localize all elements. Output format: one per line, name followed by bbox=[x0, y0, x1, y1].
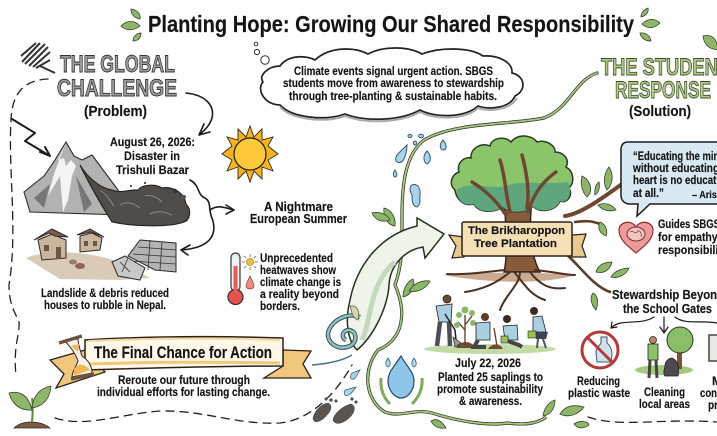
heading: the global challenge bbox=[21, 43, 177, 120]
thought cloud: through tree-planting & sustainable habits. bbox=[289, 89, 497, 103]
text: landslide caption: Landslide & debris reduced bbox=[41, 286, 169, 300]
icons: rain drops and footprint bbox=[393, 134, 446, 207]
icon: thermometer bbox=[228, 253, 258, 304]
heading: the global challenge: CHALLENGE bbox=[57, 75, 177, 102]
heading: stewardship beyond the school gates bbox=[612, 287, 717, 316]
text: july 22 planting: promote sustainability bbox=[437, 382, 543, 396]
text: reroute our future: individual efforts for lasting change. bbox=[97, 385, 270, 399]
text: disaster date: August 26, 2026: bbox=[110, 135, 195, 149]
thought cloud: Climate events signal urgent action. SBGS bbox=[294, 64, 493, 78]
icon: no plastic bottle bbox=[582, 332, 618, 368]
text: july 22 planting: July 22, 2026 bbox=[455, 356, 521, 370]
heading: the global challenge: (Problem) bbox=[84, 104, 147, 120]
icon: sun bbox=[222, 126, 278, 182]
heading: the student response: (Solution) bbox=[629, 104, 691, 120]
text: unprecedented heatwaves: a reality beyond bbox=[260, 287, 339, 301]
icon: mountain and landslide bbox=[24, 142, 190, 226]
text: nightmare european summer: A Nightmare bbox=[264, 200, 333, 214]
icon: footprints bbox=[313, 398, 357, 423]
arrows: stewardship branches bbox=[611, 317, 717, 333]
arrow: challenge to disaster bbox=[186, 93, 213, 135]
text: landslide caption bbox=[41, 286, 169, 312]
text: cleaning local areas: local areas bbox=[639, 397, 690, 411]
text: unprecedented heatwaves: borders. bbox=[260, 299, 300, 313]
text: guides sbgs bbox=[658, 217, 717, 257]
text: unprecedented heatwaves: Unprecedented bbox=[260, 251, 333, 265]
icon: cleaning person with tree bbox=[635, 327, 693, 378]
text: disaster date: Disaster in bbox=[124, 149, 180, 163]
icon: book bbox=[709, 335, 717, 361]
text: cleaning local areas: Cleaning bbox=[644, 385, 685, 399]
thought cloud bbox=[254, 42, 523, 121]
text: unprecedented heatwaves: climate change is bbox=[260, 275, 341, 289]
text: reducing plastic waste bbox=[568, 374, 630, 400]
icon: heart with brain bbox=[619, 222, 653, 253]
vine: green connecting stem bbox=[368, 73, 597, 428]
heading: the student response bbox=[601, 36, 717, 120]
icon: destroyed houses and wall bbox=[26, 229, 176, 280]
text: july 22 planting: Planted 25 saplings to bbox=[438, 370, 543, 384]
title: Planting Hope: Growing Our Shared Responsibility bbox=[148, 11, 634, 37]
banner: the brikharoppon tree plantation: The Brikharoppon bbox=[468, 225, 565, 237]
text: nightmare european summer: European Summer bbox=[250, 212, 347, 226]
icon: wind spiral bbox=[312, 306, 360, 396]
heading: the global challenge: THE GLOBAL bbox=[60, 51, 175, 78]
text: july 22 planting bbox=[437, 356, 543, 408]
people planting saplings bbox=[424, 295, 556, 354]
text: mindful consumption practices bbox=[700, 374, 717, 412]
text: unprecedented heatwaves: heatwaves show bbox=[260, 263, 337, 277]
speech bubble: aristotle quote: at all.” bbox=[633, 186, 664, 200]
arrow: disaster squiggle to europe and rubble bbox=[181, 180, 234, 255]
dashed path: left and bottom route bbox=[9, 79, 717, 423]
text: nightmare european summer bbox=[250, 200, 347, 226]
text: unprecedented heatwaves bbox=[260, 251, 341, 313]
tree bbox=[443, 136, 629, 310]
banner: the brikharoppon tree plantation: Tree Plantation bbox=[474, 238, 557, 250]
banner: the brikharoppon tree plantation bbox=[449, 222, 586, 258]
text: reroute our future bbox=[97, 373, 270, 399]
text: cleaning local areas bbox=[639, 385, 690, 411]
text: reducing plastic waste: plastic waste bbox=[568, 386, 630, 400]
text: july 22 planting: & awareness. bbox=[459, 394, 522, 408]
text: disaster date bbox=[110, 135, 195, 177]
speech bubble: aristotle quote bbox=[621, 142, 717, 216]
banner: the final chance for action: The Final Chance for Action bbox=[94, 343, 272, 362]
text: disaster date: Trishuli Bazar bbox=[116, 163, 189, 177]
text: reducing plastic waste: Reducing bbox=[577, 374, 620, 388]
icon: water drop with recycle arrows bbox=[381, 356, 422, 404]
icon: seedling bbox=[9, 386, 51, 428]
text: landslide caption: houses to rubble in Nepal. bbox=[44, 298, 166, 312]
icon: hourglass bbox=[59, 336, 94, 379]
text: reroute our future: Reroute our future through bbox=[118, 373, 250, 387]
icon: big curved arrow bbox=[347, 218, 444, 350]
thought cloud: students move from awareness to stewardship bbox=[283, 76, 504, 90]
banner: the final chance for action bbox=[50, 337, 311, 388]
icon: landslide arrow zigzag bbox=[12, 119, 50, 156]
